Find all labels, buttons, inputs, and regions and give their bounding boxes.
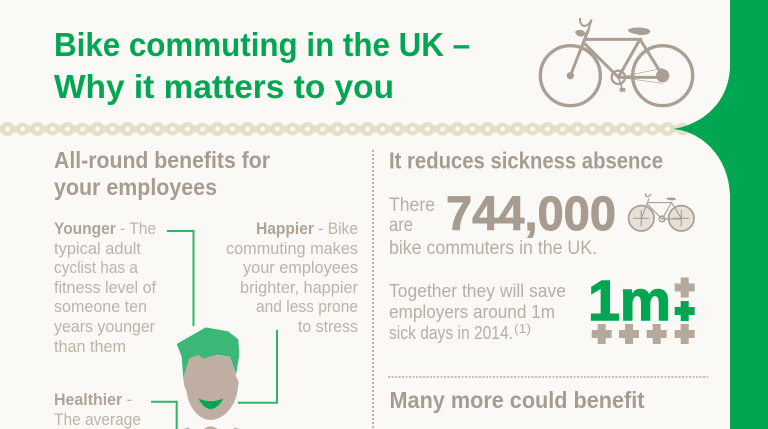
chain divider — [0, 122, 690, 136]
stat: 1m: 1m — [588, 269, 671, 333]
text: younger: someone ten — [54, 297, 147, 316]
heading: sickness absence: It reduces sickness absence — [389, 148, 663, 174]
text: sick days saved: sick days in 2014. — [389, 322, 513, 343]
text: there are: are — [389, 215, 413, 236]
connector: younger — [167, 231, 194, 326]
text: happier: your employees — [243, 258, 358, 277]
icon: small bicycle — [629, 193, 694, 231]
text: healthier: Healthier - — [54, 390, 132, 409]
text: younger: than them — [54, 337, 126, 356]
text: happier: and less prone — [256, 297, 358, 316]
text: younger: typical adult — [54, 239, 141, 258]
text: younger — [54, 219, 156, 356]
text: happier: Happier - Bike — [256, 219, 358, 238]
text: happier: brighter, happier — [240, 278, 358, 297]
connector: healthier — [151, 402, 177, 429]
text: healthier — [54, 390, 141, 429]
heading: benefits: All-round benefits for — [54, 147, 270, 173]
text: younger: years younger — [54, 317, 155, 336]
green side band — [673, 0, 768, 429]
text: sick days saved: (1) — [514, 321, 531, 336]
heading: benefits: your employees — [54, 174, 217, 200]
heading: many more could benefit: Many more could benefit — [390, 387, 645, 413]
text: sick days saved: employers around 1m — [389, 301, 555, 322]
text: younger: fitness level of — [54, 278, 156, 297]
icon: large bicycle — [540, 18, 693, 106]
text: there are: There — [389, 195, 435, 216]
text: happier: to stress — [298, 317, 358, 336]
text: healthier: The average — [54, 410, 141, 429]
text: bike commuters: bike commuters in the UK. — [389, 238, 597, 259]
text: happier: commuting makes — [226, 239, 358, 258]
heading: benefits — [54, 147, 270, 200]
text: younger: cyclist has a — [54, 258, 138, 277]
icon: plus signs — [592, 278, 695, 344]
text: happier — [226, 219, 358, 336]
icon: face — [177, 327, 240, 429]
text: sick days saved — [389, 280, 566, 343]
title — [54, 26, 470, 105]
text: there are — [389, 195, 435, 236]
title: Bike commuting in the UK – — [54, 26, 470, 63]
stat: 744,000: 744,000 — [446, 188, 616, 241]
connector: happier — [238, 330, 277, 403]
title: Why it matters to you — [54, 68, 394, 105]
text: sick days saved: Together they will save — [389, 280, 566, 301]
text: younger: Younger - The — [54, 219, 156, 238]
